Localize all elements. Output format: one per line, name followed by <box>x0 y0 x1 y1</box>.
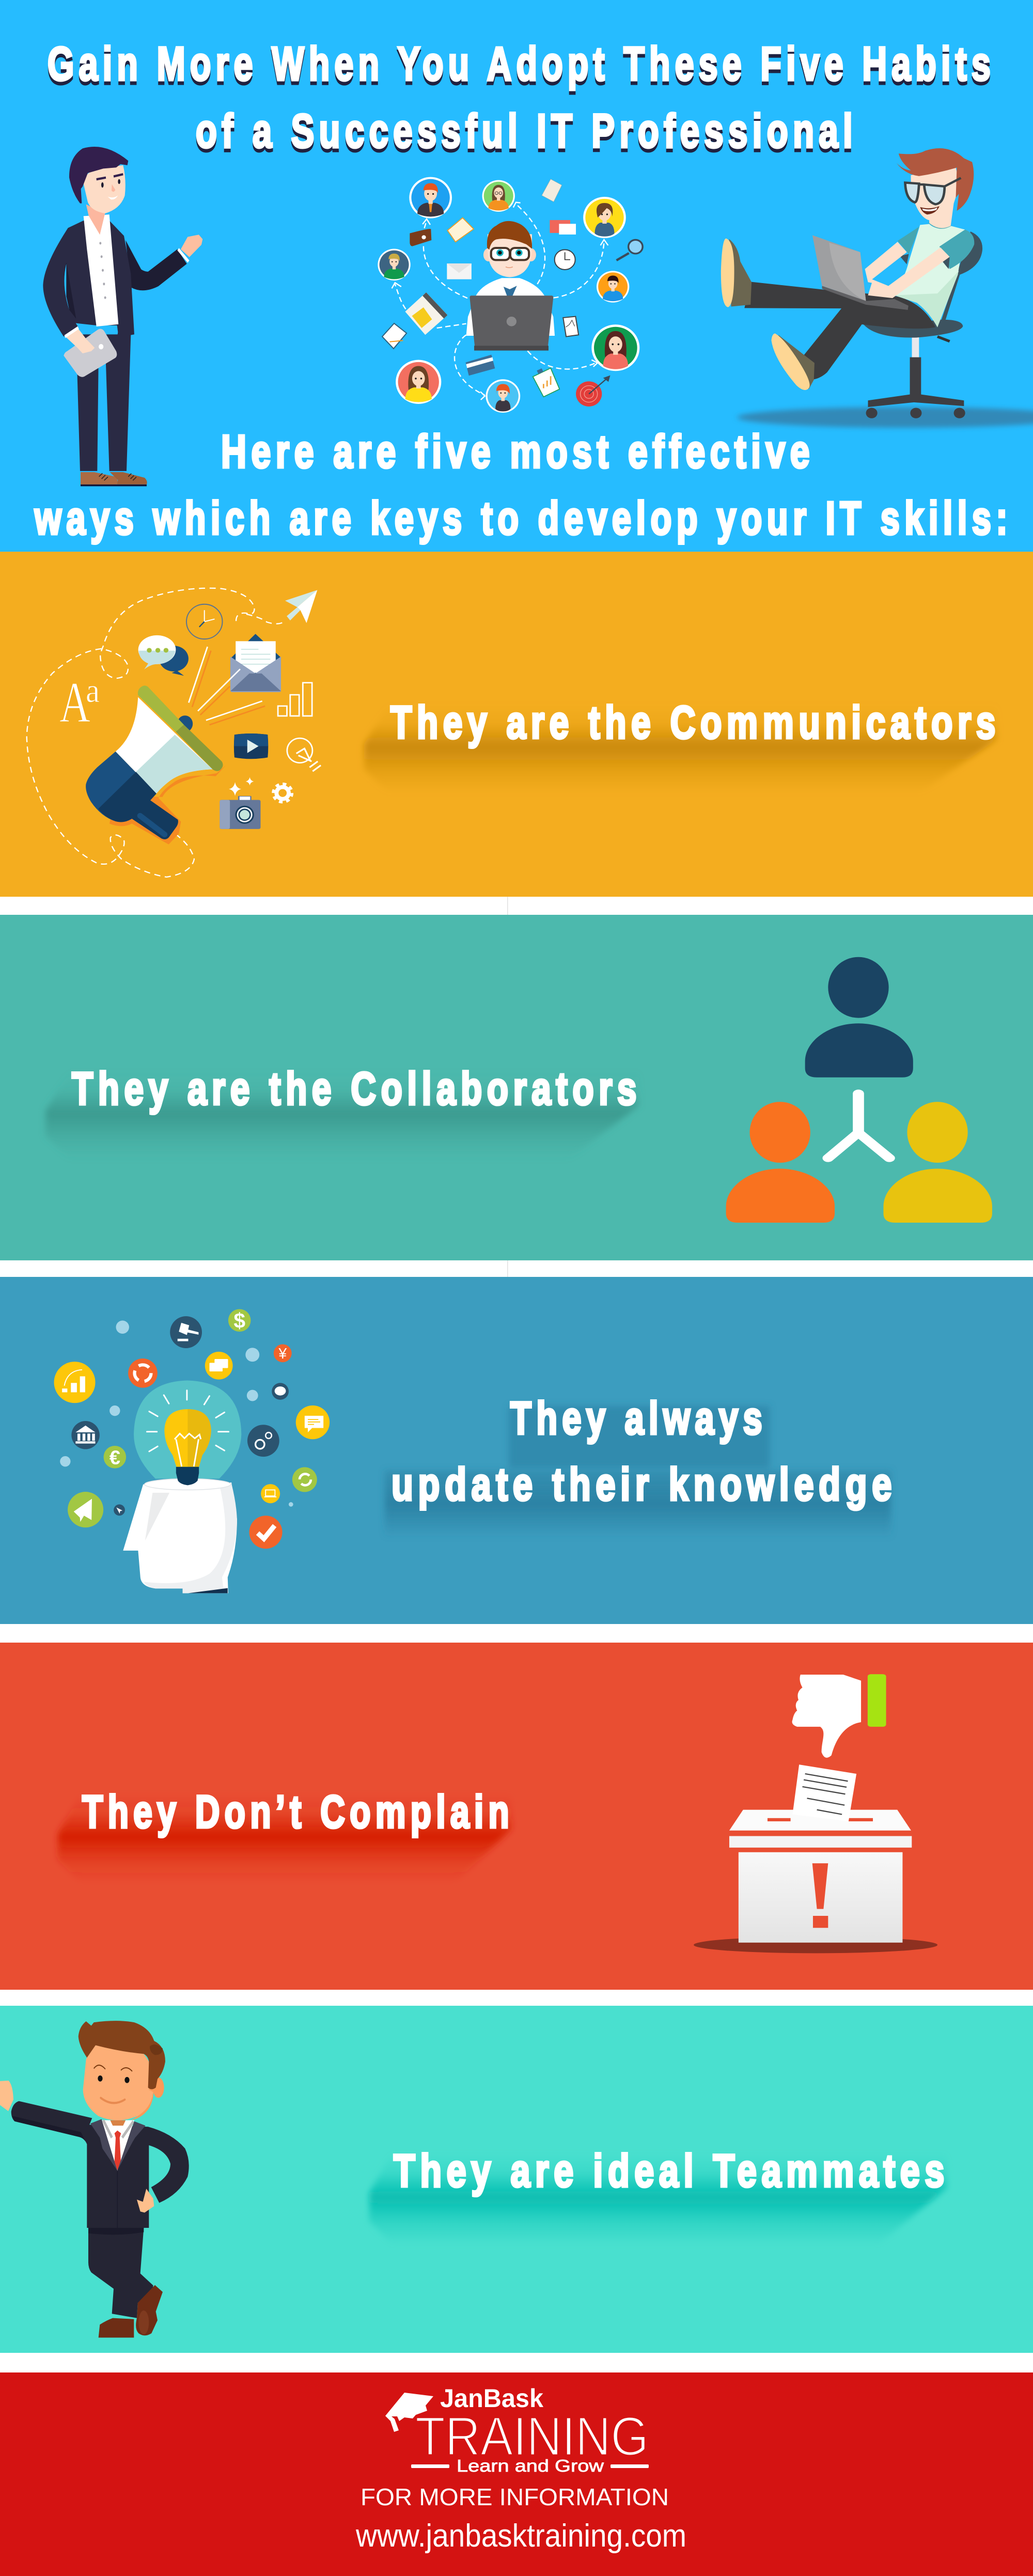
avatar: man in suit <box>409 177 452 218</box>
panel: footer <box>0 2372 1033 2576</box>
icon: graduation cap <box>385 2393 433 2432</box>
heading <box>392 1392 897 1510</box>
avatar: man orange <box>597 271 629 303</box>
panel: communicators <box>0 552 1033 897</box>
subtitle <box>34 426 1012 544</box>
text shadow <box>369 2153 947 2244</box>
text shadow <box>364 705 997 793</box>
heading: They always <box>510 1392 767 1444</box>
central figure with laptop <box>466 221 555 351</box>
avatar: woman dark green <box>591 324 639 371</box>
subtitle: Here are five most effective <box>221 426 815 478</box>
avatar: man slate <box>378 249 411 280</box>
label: Aa: A <box>59 670 90 735</box>
logo: JanBask Training <box>385 2384 649 2475</box>
logo: JanBask Training: JanBask <box>440 2384 543 2413</box>
avatar: woman yellow <box>583 197 626 238</box>
call to action: FOR MORE INFORMATION <box>361 2484 669 2510</box>
illustration: head with lightbulb and symbols: $ <box>233 1309 245 1333</box>
illustration: head with lightbulb and symbols: € <box>109 1447 120 1469</box>
illustration: standing businessman <box>43 147 202 486</box>
illustration: megaphone with communication symbols <box>27 588 321 877</box>
title <box>48 38 995 158</box>
divider tick <box>507 897 508 915</box>
logo: JanBask Training: TRAINING <box>415 2406 649 2467</box>
panel: update knowledge <box>0 1277 1033 1624</box>
text shadow <box>45 1071 639 1160</box>
heading: They are the Collaborators <box>72 1063 641 1114</box>
illustration: head with lightbulb and symbols <box>54 1309 330 1593</box>
panel: complain <box>0 1643 1033 1990</box>
icon: three connected people <box>726 957 992 1223</box>
panel: header <box>0 0 1033 552</box>
illustration: man with laptop on chair <box>721 148 1033 428</box>
illustration: smiling businessman leaning <box>0 2021 189 2338</box>
small icons around the network <box>382 179 643 407</box>
panel: teammates <box>0 2006 1033 2353</box>
illustration: network of people around a laptop <box>378 177 643 413</box>
logo: JanBask Training: Learn and Grow <box>457 2456 604 2475</box>
avatar: woman light blue <box>486 379 520 413</box>
panel: collaborators <box>0 915 1033 1260</box>
text shadow <box>385 1406 891 1538</box>
avatar: woman coral <box>396 360 441 404</box>
heading: update their knowledge <box>392 1458 897 1510</box>
text shadow <box>58 1794 511 1883</box>
avatar: woman green <box>482 180 515 212</box>
illustration: head with lightbulb and symbols: ¥ <box>278 1346 287 1362</box>
icon: thumbs down over ballot box <box>694 1674 937 1953</box>
label: Aa: a <box>86 672 100 710</box>
heading: They Don’t Complain <box>82 1786 514 1837</box>
website: www.janbasktraining.com <box>355 2518 686 2554</box>
